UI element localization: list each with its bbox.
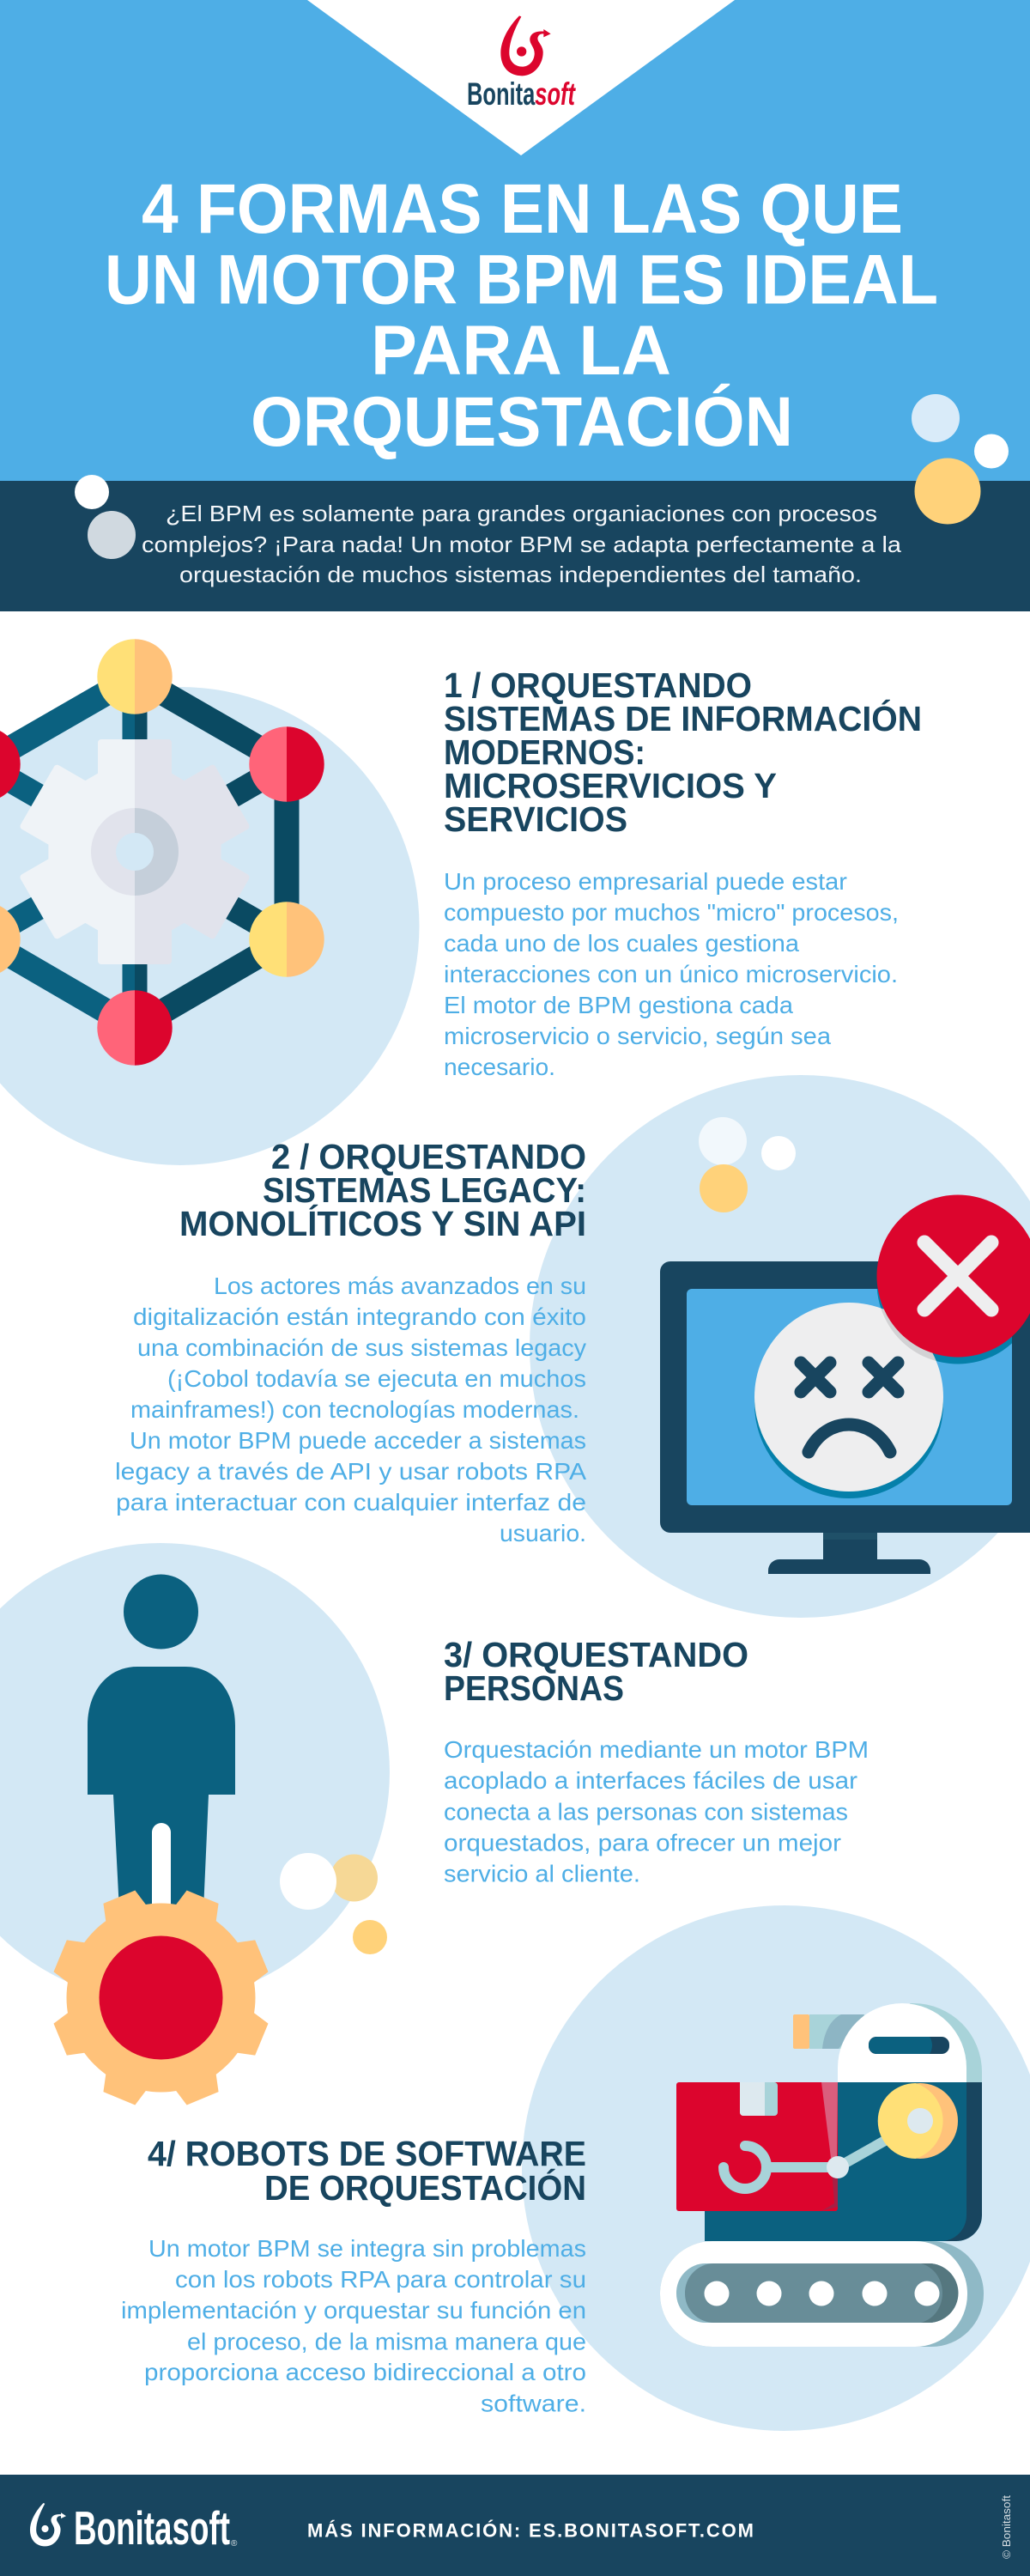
panel 3: personas (0, 1543, 869, 2107)
intro text: complejos? ¡Para nada! Un motor BPM se adapta perfectamente a la (142, 532, 902, 557)
body text 4: con los robots RPA para controlar su (175, 2266, 586, 2293)
body text 3: acoplado a interfaces fáciles de usar (444, 1767, 857, 1794)
heading 2 (179, 1137, 586, 1243)
body text 2 (115, 1273, 586, 1546)
panel 1: sistemas de información modernos (0, 639, 922, 1165)
title: ORQUESTACIÓN (251, 383, 793, 461)
body text 4: software. (481, 2391, 586, 2416)
heading 1 (444, 665, 922, 839)
heading 1: MICROSERVICIOS Y (444, 766, 777, 805)
title: UN MOTOR BPM ES IDEAL (105, 240, 938, 319)
background circle 2 (530, 1075, 1030, 1618)
body text 4: el proceso, de la misma manera que (187, 2329, 586, 2354)
body text 1: El motor de BPM gestiona cada (444, 992, 793, 1018)
icon: network with gear (0, 639, 324, 1066)
body text 3: servicio al cliente. (444, 1860, 640, 1887)
robot tracks (660, 2241, 984, 2347)
body text 4: proporciona acceso bidireccional a otro (144, 2359, 586, 2385)
body text 1 (444, 868, 899, 1080)
copyright: © Bonitasoft (1000, 2495, 1013, 2559)
body text 1: compuesto por muchos "micro" procesos, (444, 899, 899, 926)
robot camera (793, 2014, 864, 2049)
red box (676, 2082, 838, 2211)
body text 4: implementación y orquestar su función en (121, 2297, 586, 2324)
white logo triangle (307, 0, 735, 155)
panel 4: robots de software (121, 1905, 1030, 2431)
body text 1: interacciones con un único microservicio. (444, 961, 898, 987)
heading 1: SERVICIOS (444, 799, 627, 839)
robot arm (724, 2137, 891, 2189)
intro band (0, 481, 1030, 611)
title: PARA LA (371, 312, 671, 390)
body text 2: Los actores más avanzados en su (214, 1273, 586, 1299)
decorative circles 2 (699, 1117, 796, 1212)
heading 1: MODERNOS: (444, 732, 645, 772)
intro text: orquestación de muchos sistemas independientes del tamaño. (179, 562, 862, 587)
icon: red error badge (877, 1195, 1030, 1357)
robot head (838, 2003, 982, 2083)
registered mark: ® (231, 2539, 238, 2549)
body text 2: una combinación de sus sistemas legacy (137, 1334, 586, 1361)
decorative header circles (75, 394, 1009, 559)
body text 1: necesario. (444, 1054, 555, 1080)
body text 1: microservicio o servicio, según sea (444, 1023, 831, 1049)
body text 2: Un motor BPM puede acceder a sistemas (130, 1427, 586, 1454)
footer (0, 2475, 1030, 2576)
footer logo (30, 2501, 238, 2555)
heading 4: 4/ ROBOTS DE SOFTWARE (148, 2134, 586, 2173)
title: 4 FORMAS EN LAS QUE (142, 170, 903, 248)
body text 1: Un proceso empresarial puede estar (444, 868, 847, 895)
body text 3 (444, 1736, 869, 1887)
body text 2: mainframes!) con tecnologías modernas. (130, 1396, 579, 1423)
body text 2: legacy a través de API y usar robots RPA (115, 1458, 586, 1485)
icon: footer swoosh (30, 2503, 66, 2546)
title (105, 170, 938, 461)
decorative circles 3 (280, 1853, 387, 1954)
heading 4 (148, 2134, 586, 2208)
heading 1: 1 / ORQUESTANDO (444, 665, 752, 705)
heading 3 (444, 1635, 748, 1708)
logo wordmark: Bonitasoft (467, 76, 576, 112)
panel 2: sistemas legacy (115, 1075, 1030, 1618)
icon: person on gear (52, 1575, 270, 2107)
body text 4: Un motor BPM se integra sin problemas (148, 2235, 586, 2262)
heading 3: PERSONAS (444, 1668, 624, 1708)
robot body (705, 2082, 982, 2241)
body text 4 (121, 2235, 586, 2416)
intro text (142, 501, 902, 587)
heading 3: 3/ ORQUESTANDO (444, 1635, 748, 1674)
body text 2: digitalización están integrando con éxito (133, 1303, 586, 1330)
body text 2: para interactuar con cualquier interfaz de (116, 1489, 586, 1516)
heading 2: MONOLÍTICOS Y SIN API (179, 1204, 586, 1243)
icon: monitor with sad face (660, 1195, 1030, 1574)
footer wordmark: Bonitasoft (74, 2501, 230, 2555)
body text 3: orquestados, para ofrecer un mejor (444, 1829, 841, 1856)
heading 2: 2 / ORQUESTANDO (271, 1137, 586, 1176)
heading 2: SISTEMAS LEGACY: (263, 1170, 586, 1210)
body text 2: usuario. (500, 1520, 586, 1546)
logo: Bonitasoft (467, 15, 576, 112)
heading 4: DE ORQUESTACIÓN (264, 2168, 586, 2208)
body text 1: cada uno de los cuales gestiona (444, 930, 799, 957)
intro text: ¿El BPM es solamente para grandes organiaciones con procesos (166, 501, 877, 526)
header panel (0, 0, 1030, 483)
icon: robot with box (660, 2003, 984, 2347)
background circle 1 (0, 687, 419, 1165)
body text 3: Orquestación mediante un motor BPM (444, 1736, 869, 1763)
heading 1: SISTEMAS DE INFORMACIÓN (444, 699, 922, 738)
icon: Bonitasoft swoosh (500, 15, 551, 76)
body text 3: conecta a las personas con sistemas (444, 1798, 848, 1826)
robot shoulder disc (827, 2083, 958, 2178)
footer link: MÁS INFORMACIÓN: ES.BONITASOFT.COM (307, 2519, 754, 2542)
background circle 4 (522, 1905, 1030, 2431)
background circle 3 (0, 1543, 390, 2002)
body text 2: (¡Cobol todavía se ejecuta en muchos (167, 1365, 586, 1392)
